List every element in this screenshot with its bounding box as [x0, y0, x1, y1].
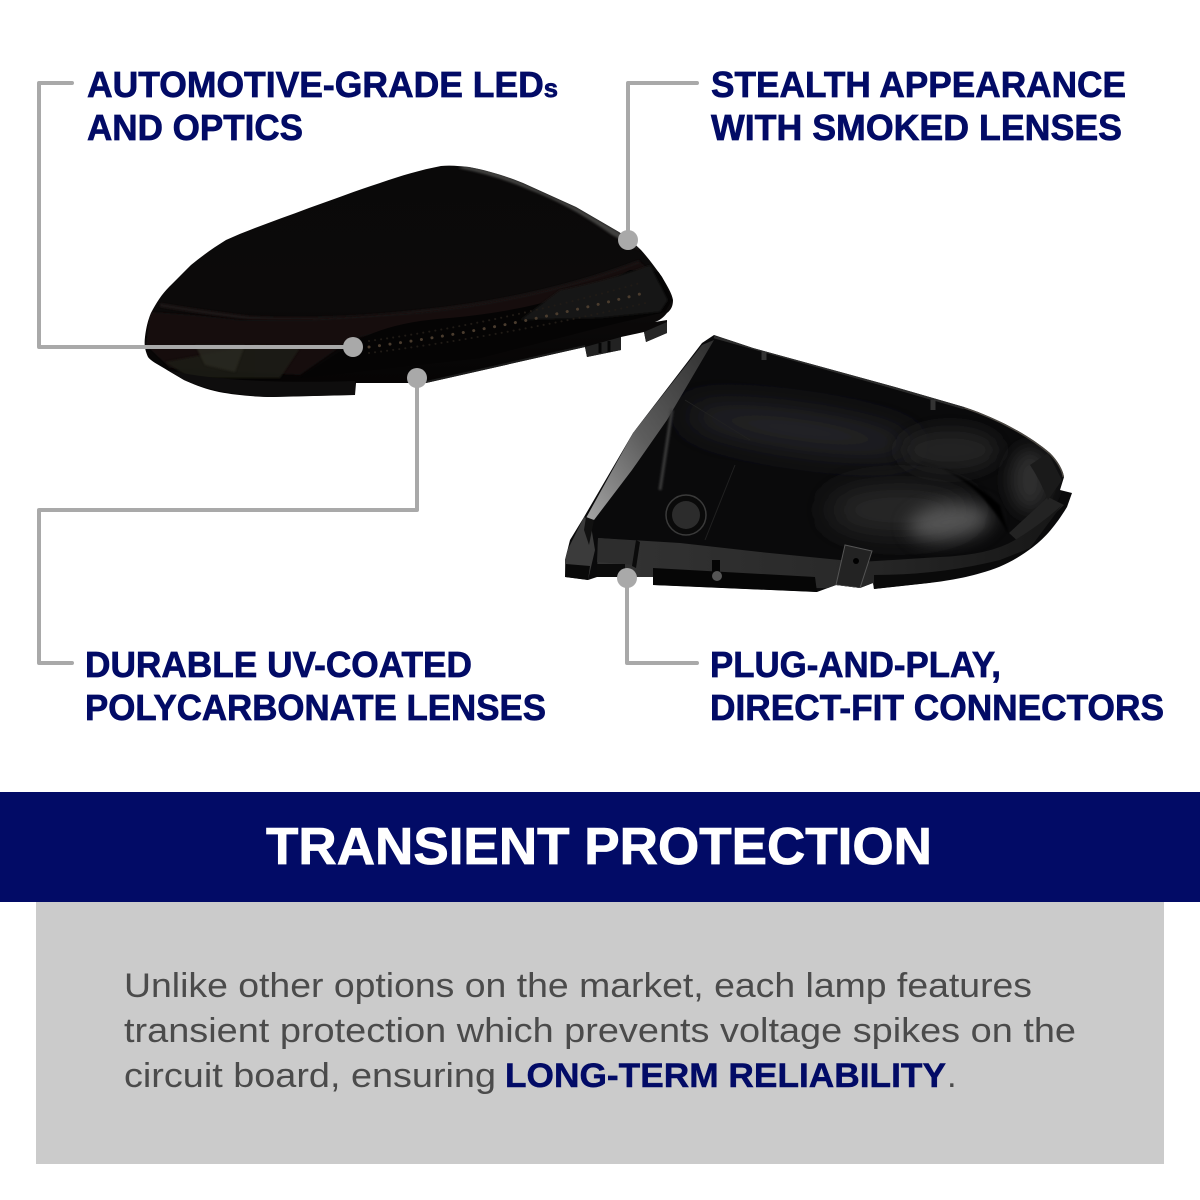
callout: automotive-grade LEDs [87, 64, 558, 148]
leader line: connectors [617, 568, 697, 663]
panel: product photo, rear mirror housing [565, 335, 1072, 592]
banner: transient protection [0, 792, 1200, 902]
callout: automotive-grade LEDs: AUTOMOTIVE-GRADE LEDs [87, 64, 558, 105]
sensor port [666, 495, 706, 535]
lower flange [597, 505, 1062, 589]
panel: description: circuit board, ensuring [124, 1057, 496, 1095]
LED dots [369, 283, 650, 353]
panel: description: transient protection which prevents voltage spikes on the [124, 1012, 1076, 1050]
panel: description: Unlike other options on the market, each lamp features [124, 967, 1032, 1005]
leader line: automotive-grade LEDs [39, 83, 363, 357]
callout: stealth appearance: STEALTH APPEARANCE [711, 64, 1126, 105]
callout: durable lenses: DURABLE UV-COATED [85, 644, 472, 685]
callout: stealth appearance: WITH SMOKED LENSES [711, 107, 1122, 148]
callout: connectors: PLUG-AND-PLAY, [710, 644, 1001, 685]
panel: description: . [947, 1057, 957, 1095]
lens strip [586, 340, 714, 520]
callout: connectors: DIRECT-FIT CONNECTORS [710, 687, 1164, 728]
callout: automotive-grade LEDs: AND OPTICS [87, 107, 303, 148]
panel: description [36, 902, 1164, 1164]
callout: durable lenses [85, 644, 546, 728]
leader line: stealth appearance [618, 83, 697, 250]
callout: stealth appearance [711, 64, 1126, 148]
panel: product photo, front mirror cover [145, 166, 673, 397]
banner: transient protection: TRANSIENT PROTECTION [266, 818, 932, 876]
callout: connectors [710, 644, 1164, 728]
callout: durable lenses: POLYCARBONATE LENSES [85, 687, 546, 728]
panel: description: LONG-TERM RELIABILITY [505, 1057, 946, 1095]
leader line: durable lenses [39, 368, 427, 663]
